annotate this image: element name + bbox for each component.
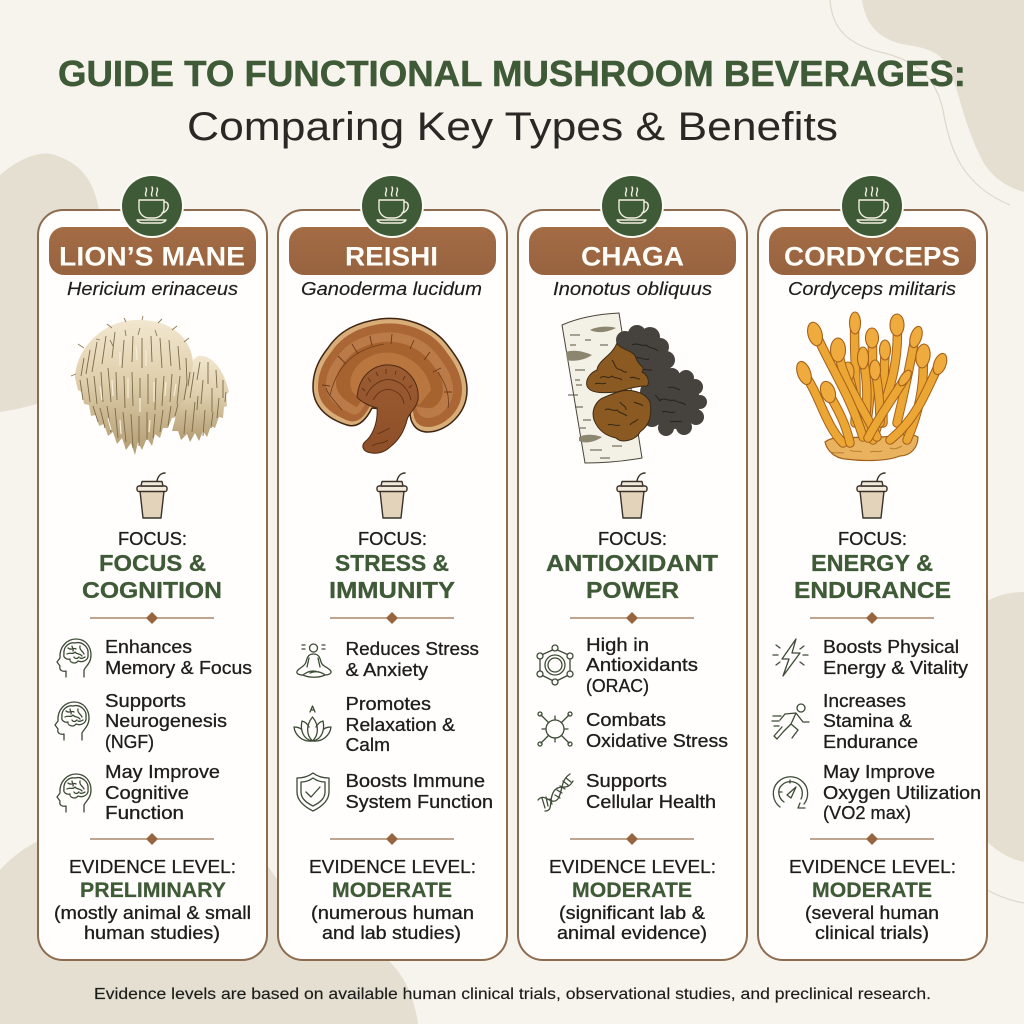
benefit text xyxy=(105,637,252,678)
evidence block: MODERATE xyxy=(812,879,932,902)
heading banner: reishi xyxy=(289,227,496,275)
focus label: FOCUS: xyxy=(838,529,907,549)
evidence block: (significant lab & xyxy=(559,903,705,923)
evidence block: EVIDENCE LEVEL: xyxy=(69,857,236,877)
icon: lightning bolt xyxy=(773,639,808,676)
evidence block: human studies) xyxy=(84,923,220,943)
icon: shield with check xyxy=(297,773,329,811)
focus label: FOCUS: xyxy=(118,529,187,549)
evidence block: (numerous human xyxy=(311,903,474,923)
icon: coffee cup badge xyxy=(840,174,904,238)
focus heading: POWER xyxy=(586,577,679,603)
icon: gauge xyxy=(773,777,808,808)
icon: DNA helix xyxy=(538,774,573,811)
heading banner: lion's mane xyxy=(49,227,256,275)
background blob: top right xyxy=(862,0,1024,192)
evidence block xyxy=(549,857,716,943)
background line: bottom right xyxy=(987,890,1024,903)
focus heading xyxy=(82,550,222,603)
benefit text: Reduces Stress xyxy=(346,639,479,659)
benefit text xyxy=(346,694,455,755)
illustration: lion's mane mushroom xyxy=(71,316,229,455)
benefit text xyxy=(586,710,728,751)
evidence block: and lab studies) xyxy=(322,923,461,943)
icon: coffee cup badge xyxy=(120,174,184,238)
benefit text: Supports xyxy=(586,771,667,791)
evidence block: (mostly animal & small xyxy=(54,903,251,923)
evidence block xyxy=(309,857,476,943)
focus heading: IMMUNITY xyxy=(329,577,455,603)
benefit text: Boosts Immune xyxy=(346,771,485,791)
background blob: bottom left xyxy=(0,838,418,1024)
benefit text: (NGF) xyxy=(105,732,154,752)
evidence block: EVIDENCE LEVEL: xyxy=(789,857,956,877)
benefit text: Relaxation & xyxy=(346,715,455,735)
benefit text: Antioxidants xyxy=(586,655,698,675)
heading banner: cordyceps: CORDYCEPS xyxy=(784,242,960,272)
heading banner: lion's mane: LION’S MANE xyxy=(59,242,245,272)
focus heading xyxy=(546,550,719,603)
focus heading: ANTIOXIDANT xyxy=(546,550,719,576)
benefit text: Combats xyxy=(586,710,666,730)
evidence block: EVIDENCE LEVEL: xyxy=(309,857,476,877)
benefit text: Calm xyxy=(346,735,390,755)
benefit text: Supports xyxy=(105,691,186,711)
evidence block: animal evidence) xyxy=(557,923,707,943)
benefit text: Energy & Vitality xyxy=(823,658,968,678)
illustration: reishi mushroom xyxy=(313,318,467,453)
heading banner: cordyceps xyxy=(769,227,976,275)
focus heading: ENDURANCE xyxy=(794,577,951,603)
benefit text xyxy=(586,635,698,696)
focus label: FOCUS: xyxy=(358,529,427,549)
title: GUIDE TO FUNCTIONAL MUSHROOM BEVERAGES: xyxy=(58,53,966,94)
evidence block: MODERATE xyxy=(572,879,692,902)
evidence block: clinical trials) xyxy=(815,923,929,943)
benefit text: High in xyxy=(586,635,649,655)
icon: takeaway cup xyxy=(137,473,167,518)
benefit text xyxy=(823,637,968,678)
benefit text xyxy=(346,771,493,812)
benefit text: Endurance xyxy=(823,732,918,752)
benefit text: Cellular Health xyxy=(586,792,716,812)
icon: brain xyxy=(57,639,91,677)
benefit text xyxy=(823,762,981,823)
icon: coffee cup badge xyxy=(360,174,424,238)
background blob: right xyxy=(970,592,1024,862)
panel: chaga xyxy=(518,174,747,960)
benefit text xyxy=(105,691,227,752)
icon: takeaway cup xyxy=(377,473,407,518)
benefit text: Promotes xyxy=(346,694,431,714)
benefit text: Function xyxy=(105,803,184,823)
benefit text: May Improve xyxy=(105,762,220,782)
icon: coffee cup badge xyxy=(600,174,664,238)
focus label: FOCUS: xyxy=(598,529,667,549)
focus heading xyxy=(329,550,455,603)
scientific name: Inonotus obliquus xyxy=(553,279,712,299)
benefit text: Stamina & xyxy=(823,711,912,731)
benefit text: Boosts Physical xyxy=(823,637,959,657)
icon: molecule ring xyxy=(537,645,573,685)
heading banner: reishi: REISHI xyxy=(345,242,438,272)
icon: brain with neural network xyxy=(55,702,89,740)
benefit text: Memory & Focus xyxy=(105,658,252,678)
benefit text xyxy=(586,771,716,812)
scientific name: Ganoderma lucidum xyxy=(301,279,482,299)
evidence block xyxy=(54,857,251,943)
scientific name: Cordyceps militaris xyxy=(788,279,956,299)
focus heading xyxy=(794,550,951,603)
icon: takeaway cup xyxy=(617,473,647,518)
benefit text: Cognitive xyxy=(105,783,189,803)
heading banner: chaga: CHAGA xyxy=(581,242,684,272)
panel: reishi xyxy=(278,174,507,960)
benefit text: Oxidative Stress xyxy=(586,731,728,751)
evidence block: EVIDENCE LEVEL: xyxy=(549,857,716,877)
icon: lotus xyxy=(294,706,331,741)
panel: lion's mane xyxy=(38,174,267,960)
benefit text: Oxygen Utilization xyxy=(823,783,981,803)
focus heading: COGNITION xyxy=(82,577,222,603)
benefit text: (VO2 max) xyxy=(823,803,911,823)
footer note: Evidence levels are based on available human clinical trials, observational studies, and preclinical research. xyxy=(94,986,931,1003)
icon: brain outline xyxy=(57,774,91,812)
benefit text: Enhances xyxy=(105,637,192,657)
illustration: chaga on birch xyxy=(562,313,707,463)
evidence block: (several human xyxy=(805,903,939,923)
icon: runner xyxy=(772,704,809,739)
panel: cordyceps xyxy=(758,174,987,960)
benefit text xyxy=(105,762,220,823)
evidence block: MODERATE xyxy=(332,879,452,902)
focus heading: FOCUS & xyxy=(99,550,206,576)
benefit text xyxy=(823,691,918,752)
icon: takeaway cup xyxy=(857,473,887,518)
focus heading: ENERGY & xyxy=(811,550,933,576)
evidence block: PRELIMINARY xyxy=(80,879,226,902)
background blob: left xyxy=(0,154,100,412)
benefit text: Neurogenesis xyxy=(105,711,227,731)
benefit text: (ORAC) xyxy=(586,676,649,696)
benefit text xyxy=(346,639,479,680)
benefit text: May Improve xyxy=(823,762,935,782)
illustration: cordyceps xyxy=(794,312,949,461)
icon: free radical xyxy=(538,712,572,746)
background line: top right xyxy=(830,0,1010,205)
focus heading: STRESS & xyxy=(335,550,449,576)
subtitle: Comparing Key Types & Benefits xyxy=(187,105,838,149)
benefit text: System Function xyxy=(346,792,493,812)
benefit text: Increases xyxy=(823,691,906,711)
heading banner: chaga xyxy=(529,227,736,275)
icon: meditation xyxy=(297,644,331,677)
scientific name: Hericium erinaceus xyxy=(67,279,238,299)
evidence block xyxy=(789,857,956,943)
benefit text: & Anxiety xyxy=(346,660,428,680)
